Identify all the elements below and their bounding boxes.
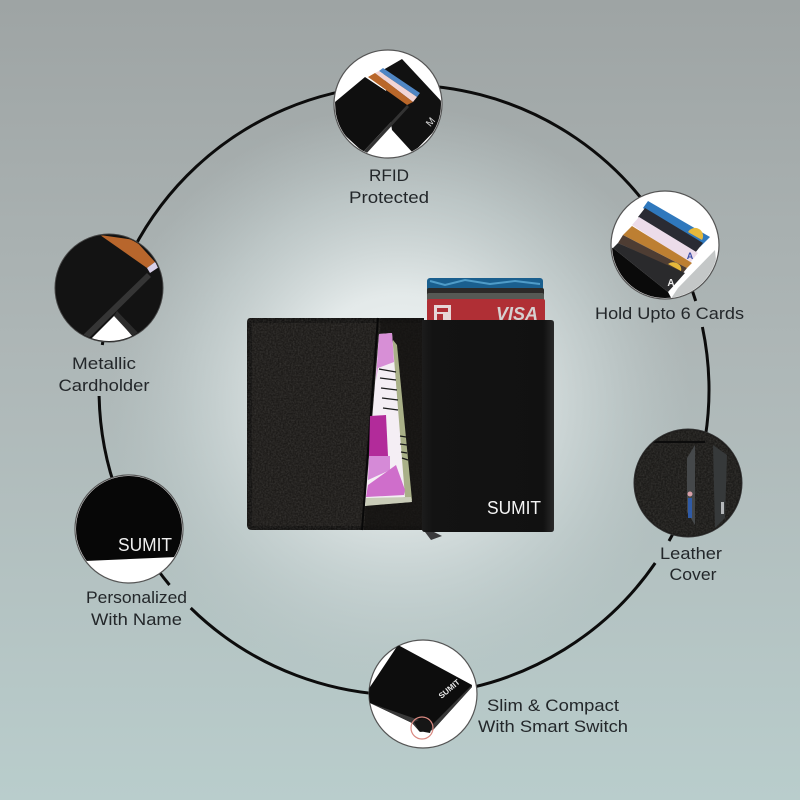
feature: Leather Cover: [634, 429, 742, 584]
label: Protected: [349, 188, 429, 207]
label: [86, 588, 187, 629]
icon: RFID card case: [334, 50, 442, 158]
label: Metallic: [72, 354, 137, 373]
switch highlight: [411, 717, 433, 739]
banknote in pocket: [365, 333, 412, 506]
feature: Metallic Cardholder: [55, 234, 163, 395]
label: Leather: [660, 544, 722, 563]
feature: Hold Upto 6 Cards: [595, 191, 744, 323]
label: [58, 354, 150, 395]
icon: engraved name: SUMIT: [118, 535, 172, 555]
feature: Slim and Compact: [368, 640, 628, 748]
feature: RFID Protected: [334, 50, 442, 207]
label: [660, 544, 722, 584]
feature: Personalized With Name: [74, 474, 186, 625]
icon: slim case with switch: SUMIT: [437, 678, 462, 701]
metal card case: SUMIT: [487, 498, 541, 518]
leather cover: [246, 317, 426, 532]
icon: leather interior: [634, 429, 742, 537]
icon: metal case corner: [55, 234, 163, 343]
icon: slim case with switch: [368, 640, 477, 748]
label: RFID: [369, 166, 409, 185]
icon: engraved name: [74, 474, 184, 584]
central wallet product: [246, 278, 554, 540]
label: [349, 166, 429, 207]
icon: fanned cards: [605, 191, 720, 305]
icon: RFID card case: M: [424, 116, 438, 129]
icon: fanned cards: A: [687, 251, 694, 261]
label: [478, 696, 628, 736]
label: Personalized: [86, 588, 187, 607]
label: Hold Upto 6 Cards: [595, 304, 744, 323]
connecting ring: [99, 85, 709, 695]
metal card case: [422, 320, 554, 540]
icon: fanned cards: A: [667, 278, 675, 289]
label: Cardholder: [58, 376, 150, 395]
label: Cover: [670, 565, 717, 584]
cards sticking out of case: VISA: [496, 304, 538, 324]
cards sticking out of case: [427, 278, 545, 324]
label: With Smart Switch: [478, 717, 628, 736]
label: Slim & Compact: [487, 696, 619, 715]
label: With Name: [91, 610, 182, 629]
